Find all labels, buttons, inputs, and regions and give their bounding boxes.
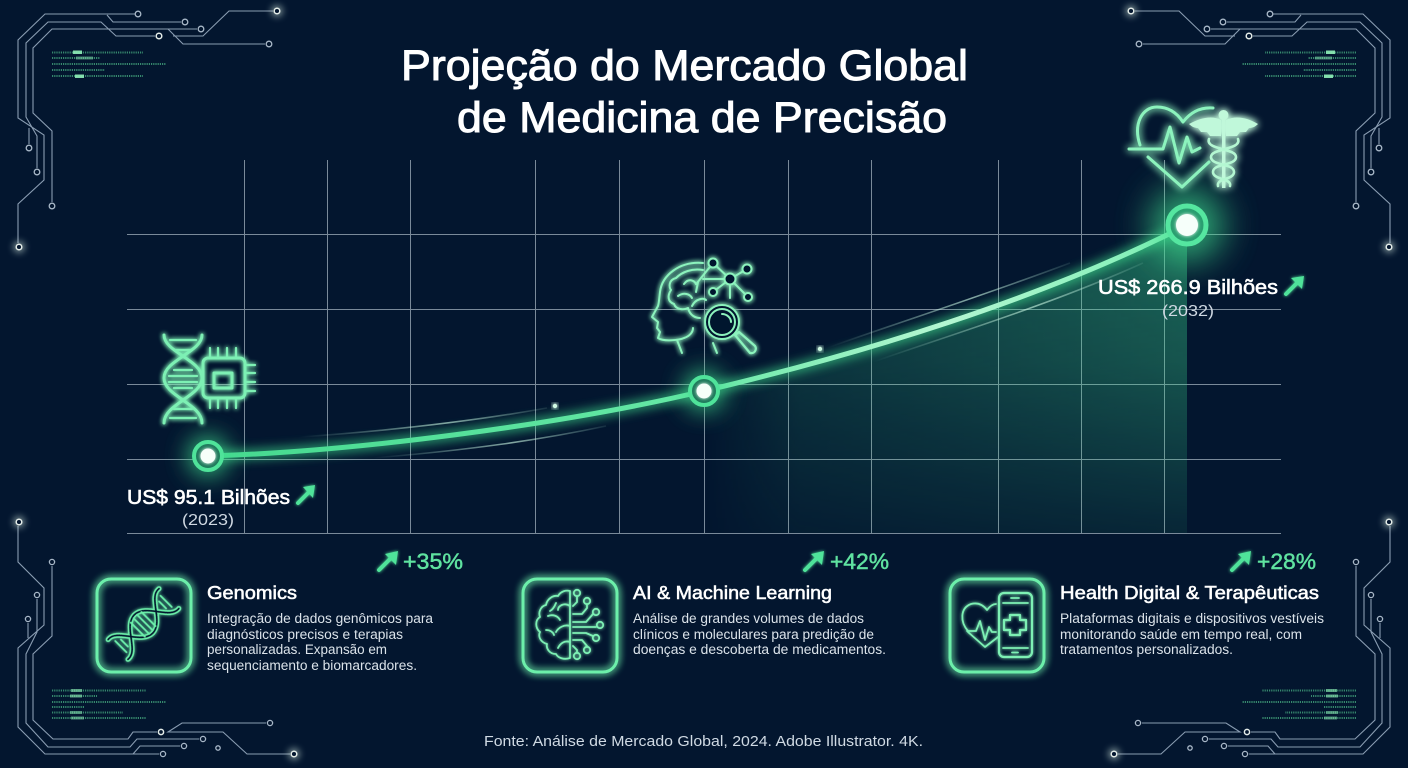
description — [1060, 611, 1324, 657]
panel: digital health — [950, 549, 1324, 672]
arrow — [1286, 276, 1304, 294]
title: de Medicina de Precisão — [457, 95, 947, 142]
title — [401, 43, 968, 142]
node mid — [684, 371, 724, 411]
growth +35%: +35% — [403, 549, 463, 574]
icon: DNA card — [97, 579, 191, 672]
label: 2032 value: (2032) — [1162, 303, 1214, 320]
growth +28%: +28% — [1257, 549, 1316, 574]
source footer: Fonte: Análise de Mercado Global, 2024. Adobe Illustrator. 4K. — [484, 733, 923, 750]
icon: brain and network — [652, 258, 756, 353]
circuit decoration: bottom left — [13, 516, 300, 760]
growth +35% — [379, 549, 463, 574]
label: 2023 value: US$ 95.1 Bilhões — [127, 486, 290, 509]
label: 2023 value: (2023) — [182, 512, 234, 529]
heading: AI & Machine Learning — [633, 582, 832, 603]
icon: brain circuit card — [523, 579, 617, 672]
description: Análise de grandes volumes de dados — [633, 611, 864, 626]
circuit decoration: top left — [13, 5, 283, 253]
area under curve — [736, 237, 1187, 533]
panel: genomics — [97, 549, 463, 673]
chart: market projection — [127, 160, 1281, 534]
icon: heart and caduceus — [1129, 107, 1258, 188]
description: doenças e descoberta de medicamentos. — [633, 642, 886, 657]
node 2023 — [188, 436, 228, 476]
heading: Health Digital & Terapêuticas — [1060, 582, 1319, 603]
description — [633, 611, 886, 657]
description — [207, 611, 433, 673]
description: monitorando saúde em tempo real, com — [1060, 627, 1302, 642]
icon: DNA and chip — [164, 335, 255, 423]
circuit decoration: bottom right — [1108, 516, 1395, 760]
description: sequenciamento e biomarcadores. — [207, 658, 417, 673]
motion streaks — [300, 263, 1143, 458]
growth +42% — [805, 549, 889, 574]
description: personalizadas. Expansão em — [207, 642, 387, 657]
description: diagnósticos precisos e terapias — [207, 627, 403, 642]
label: 2032 value — [1098, 276, 1304, 320]
arrow — [298, 485, 315, 503]
label: 2032 value: US$ 266.9 Bilhões — [1098, 276, 1278, 299]
circuit decoration: top right — [1125, 5, 1395, 253]
description: Plataformas digitais e dispositivos vestíveis — [1060, 611, 1324, 626]
description: Integração de dados genômicos para — [207, 611, 433, 626]
growth +28% — [1232, 549, 1316, 574]
node 2032 — [1151, 189, 1223, 261]
description: tratamentos personalizados. — [1060, 642, 1233, 657]
heading: Genomics — [207, 582, 297, 603]
panel: AI and machine learning — [523, 549, 889, 672]
title: Projeção do Mercado Global — [401, 43, 968, 90]
icon: phone and heart card — [950, 579, 1044, 672]
description: clínicos e moleculares para predição de — [633, 627, 874, 642]
growth curve — [208, 225, 1187, 456]
label: 2023 value — [127, 485, 315, 529]
growth +42%: +42% — [830, 549, 889, 574]
